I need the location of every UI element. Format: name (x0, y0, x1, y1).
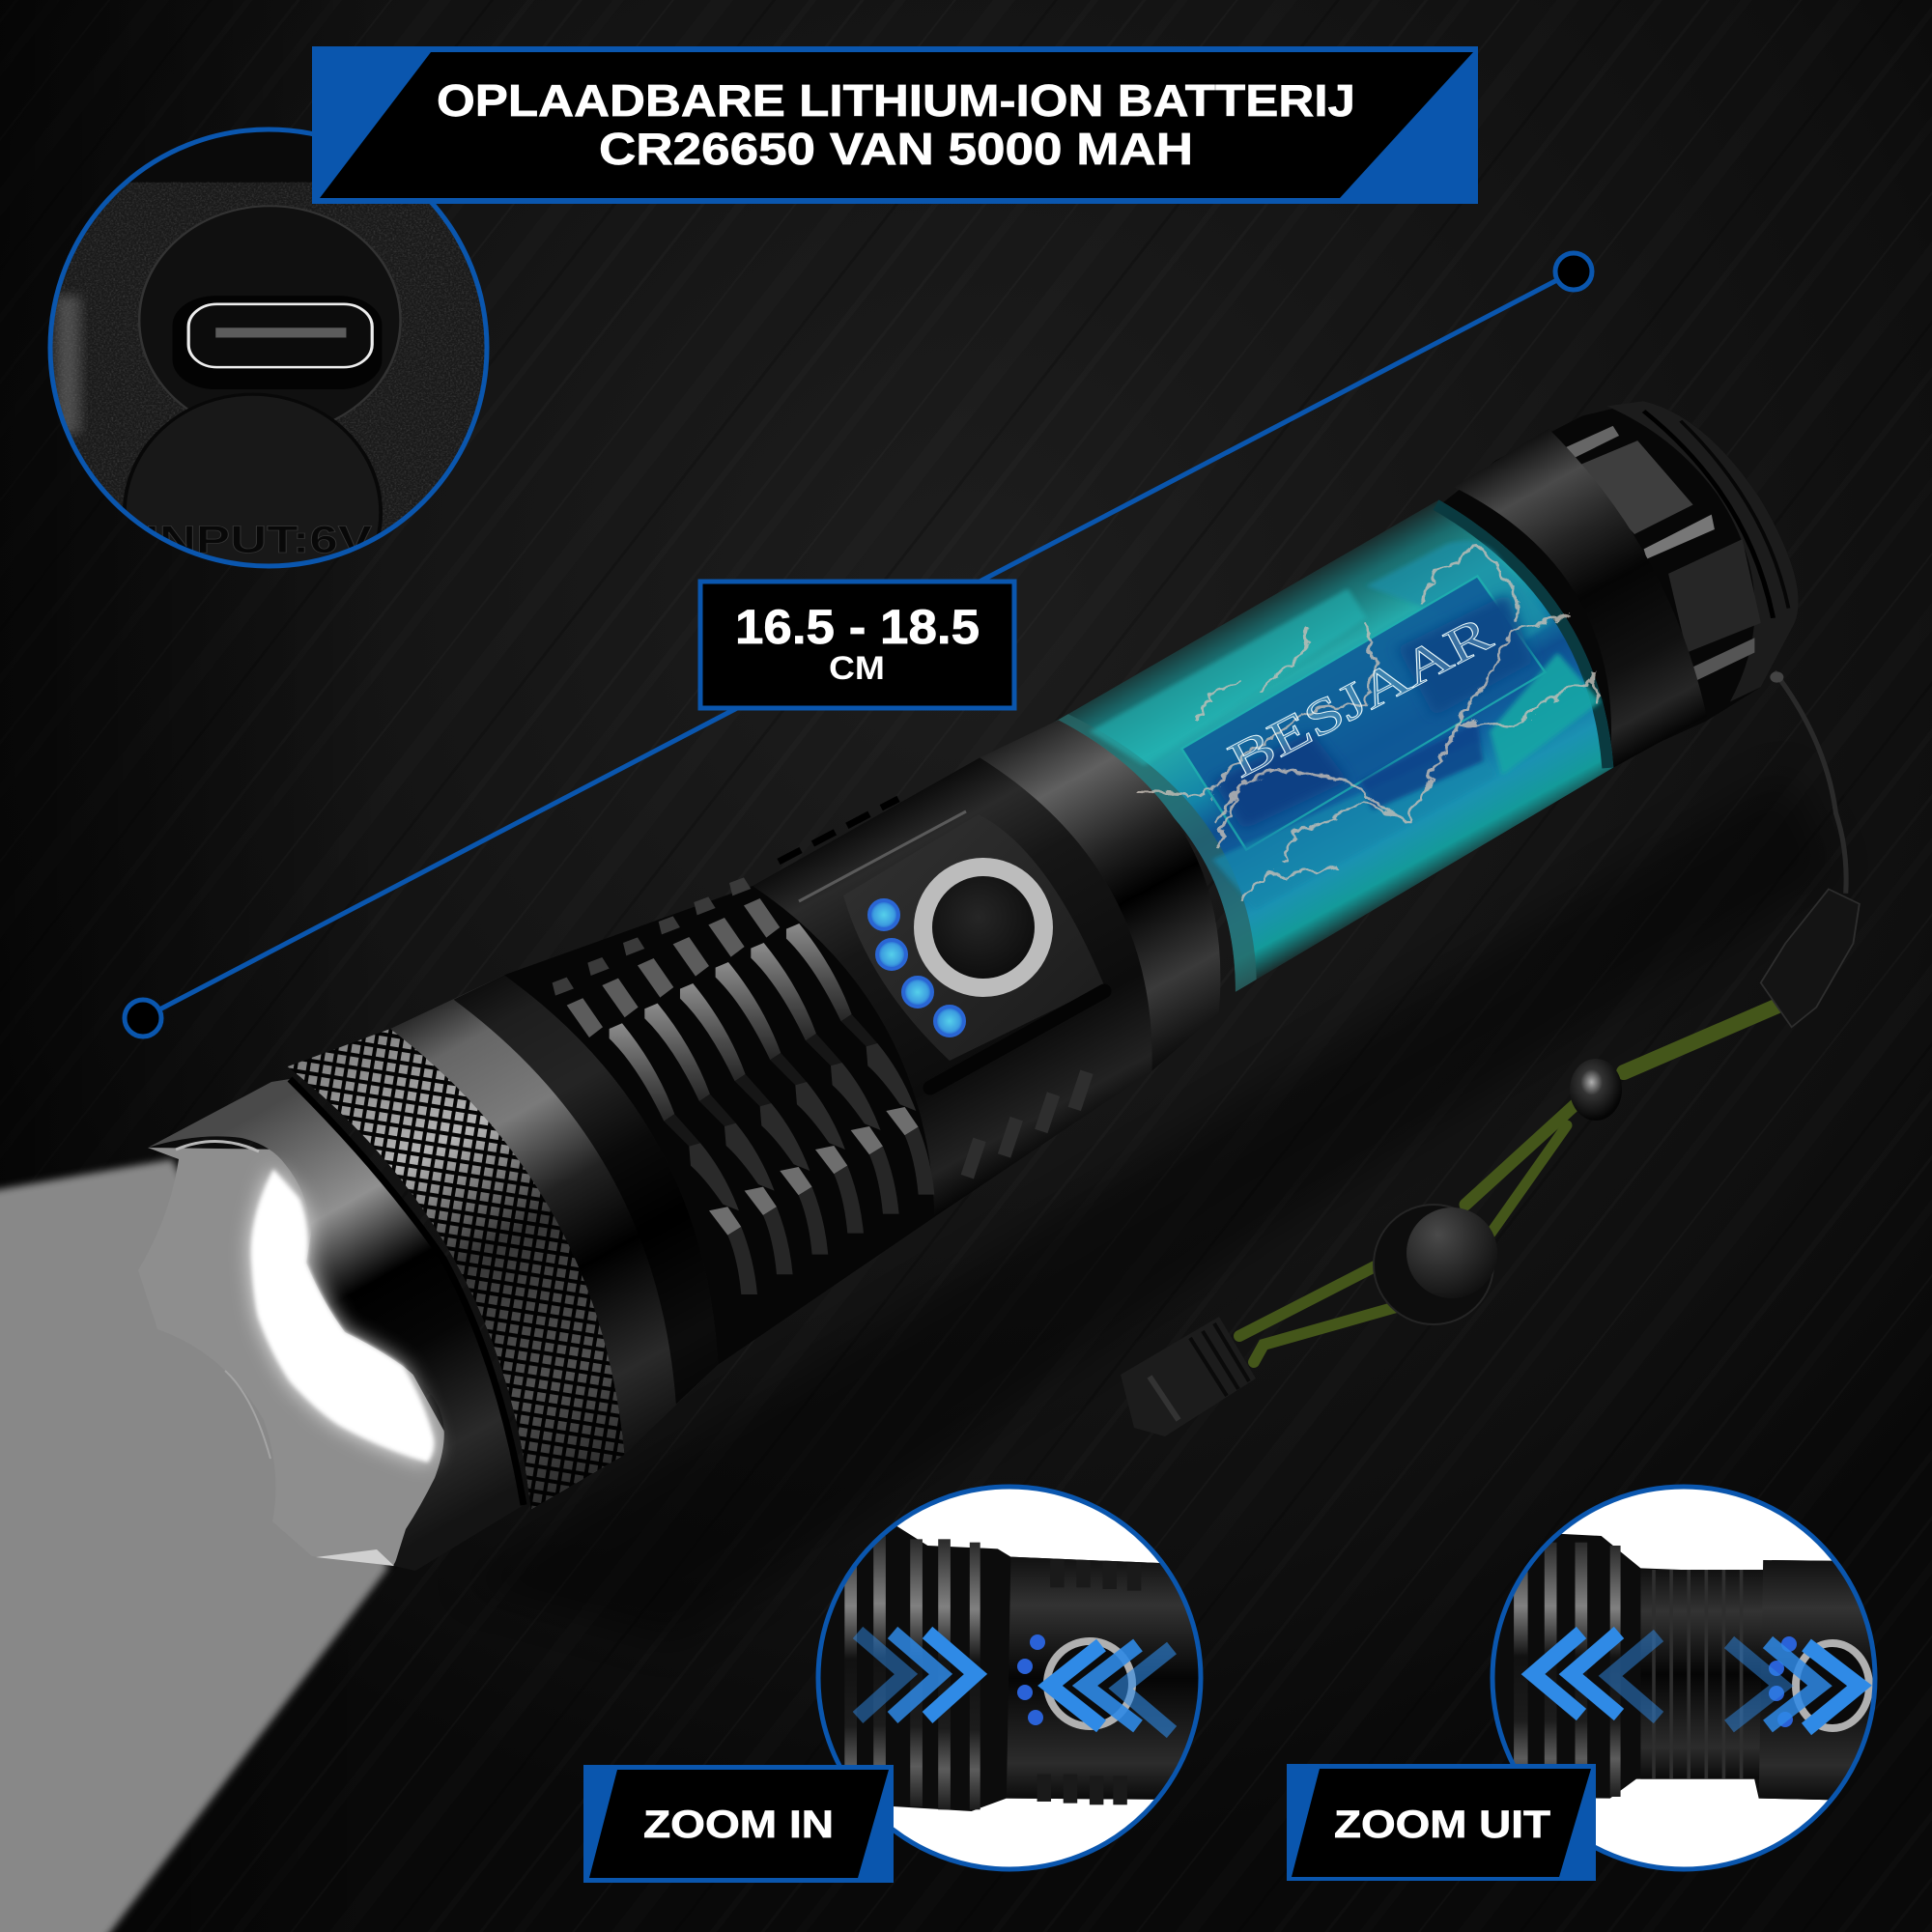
rim seam (290, 1079, 524, 1505)
upper clip (1761, 889, 1860, 1027)
rim glints (176, 1141, 259, 1151)
title text: CR26650 VAN 5000 MAH (599, 124, 1193, 174)
power button (914, 858, 1053, 997)
zoom in chevrons (858, 1633, 1172, 1732)
lens glow (251, 1169, 434, 1463)
flashlight main barrel (288, 375, 1790, 1509)
light beam (0, 1159, 388, 1932)
bezel (148, 1079, 524, 1571)
zoom out circle (1479, 1487, 1908, 1869)
tail collar (1451, 417, 1728, 770)
embossed port label: INPUT:6V (145, 519, 372, 561)
lens (251, 1169, 434, 1463)
zoom in circle (815, 1484, 1204, 1872)
glass battery window (1053, 500, 1613, 991)
upper rail line (799, 811, 966, 901)
end clip (1121, 1317, 1256, 1436)
USB-C inset circle (48, 128, 489, 568)
dimension label: CM (829, 650, 885, 687)
switch body (752, 733, 1208, 1217)
title banner (312, 46, 1478, 204)
finned section base (504, 826, 989, 1365)
smooth ring (390, 943, 781, 1455)
flashlight tail cap (1440, 401, 1799, 766)
lanyard (1121, 889, 1860, 1436)
front edge glint (225, 1371, 270, 1459)
lanyard wire (1775, 671, 1846, 894)
flashlight (138, 375, 1846, 1571)
dimension line with end dots (125, 253, 1592, 1037)
dark ring edge (454, 947, 772, 1405)
cord slider (1374, 1205, 1497, 1324)
zoom out label: ZOOM UIT (1334, 1804, 1550, 1846)
top vent notches (779, 799, 898, 862)
battery indicator LEDs (869, 900, 964, 1036)
title text (437, 75, 1355, 174)
zoom out switch ring (1796, 1643, 1869, 1728)
brand text on battery: BESJAAR (1220, 606, 1501, 789)
USB-C photo content (52, 182, 485, 564)
title text: OPLAADBARE LITHIUM-ION BATTERIJ (437, 75, 1355, 126)
dimension label (700, 582, 1014, 708)
zoom in LEDs (1017, 1634, 1045, 1725)
switch plate (843, 814, 1104, 1061)
zoom out label (1287, 1764, 1596, 1881)
zoom in label: ZOOM IN (643, 1804, 834, 1846)
vent slots (967, 1072, 1087, 1177)
bead (1570, 1059, 1622, 1121)
translucent scalloped front (138, 1148, 454, 1566)
lower rail (930, 991, 1104, 1088)
zoom out photo (1495, 1534, 1872, 1801)
battery cells and lightning (1090, 541, 1601, 909)
knurled grip (288, 989, 672, 1509)
zoom in switch ring (1047, 1641, 1132, 1726)
fin ribs (553, 877, 934, 1294)
flashlight head (138, 1079, 524, 1571)
zoom out LEDs (1769, 1636, 1797, 1727)
collar (980, 689, 1277, 1071)
zoom in label (583, 1765, 894, 1883)
zoom in photo (821, 1526, 1198, 1811)
dimension label: 16.5 - 18.5 (735, 600, 980, 654)
green cord (1239, 998, 1796, 1362)
zoom out chevrons (1533, 1633, 1860, 1729)
